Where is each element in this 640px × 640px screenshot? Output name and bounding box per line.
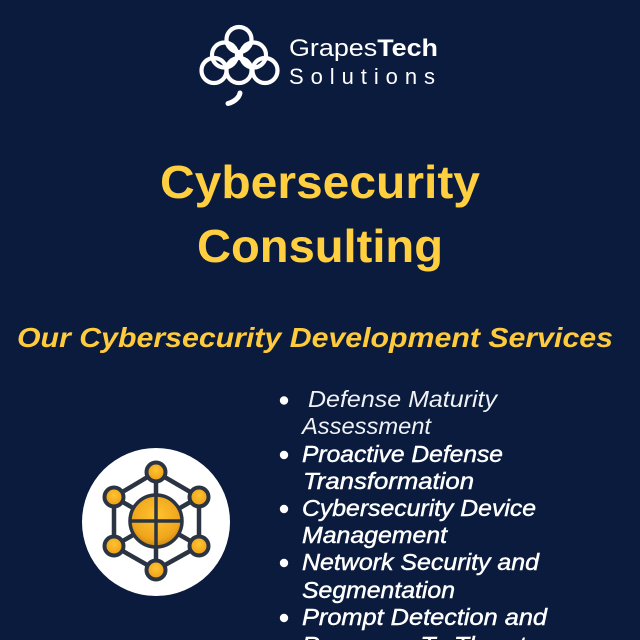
services list: Proactive Defense <box>302 441 503 467</box>
services list: Defense Maturity <box>308 386 499 412</box>
services list: Cybersecurity Device <box>302 495 536 521</box>
icon: network globe <box>82 448 230 596</box>
logo: GrapesTech Solutions <box>202 27 438 104</box>
icon: grape cluster <box>202 27 278 104</box>
services list <box>280 386 548 640</box>
services list: Assessment <box>300 413 433 439</box>
services list: Network Security and <box>302 549 540 575</box>
title: Consulting <box>197 220 443 272</box>
services list: Management <box>302 522 449 548</box>
logo tagline: Solutions <box>289 64 435 89</box>
services list: Transformation <box>303 468 474 494</box>
list bullets <box>280 396 288 622</box>
title: Cybersecurity <box>160 156 480 208</box>
services list: Prompt Detection and <box>302 604 548 630</box>
services list: Segmentation <box>302 577 455 603</box>
title <box>160 156 480 272</box>
subtitle: Our Cybersecurity Development Services <box>17 322 613 353</box>
logo wordmark: Grapes Tech <box>289 35 438 62</box>
